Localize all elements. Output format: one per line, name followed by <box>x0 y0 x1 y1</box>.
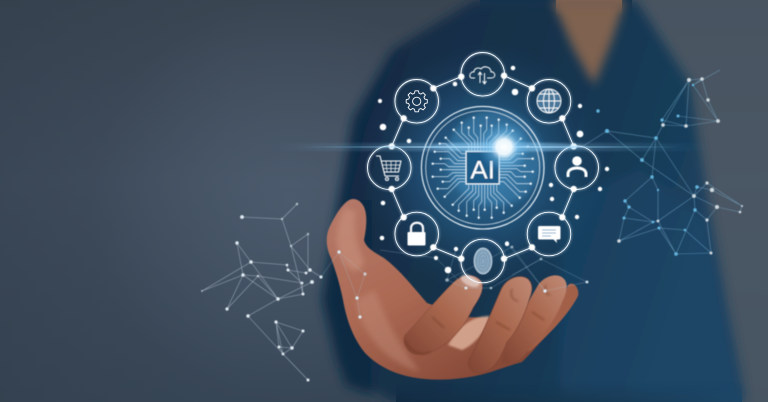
network: left cluster <box>202 204 321 380</box>
icon: padlock <box>408 223 426 246</box>
network: right cluster <box>580 70 742 254</box>
icon: chat bubble <box>538 226 560 243</box>
connecting ring and icon circles <box>368 53 598 283</box>
network: right cluster nodes <box>596 77 743 256</box>
icon: shopping cart <box>376 156 401 180</box>
emblem rings <box>421 106 544 229</box>
middle finger <box>468 277 532 373</box>
circuit traces <box>432 116 534 219</box>
ring finger <box>502 275 567 364</box>
person: blurred shirt <box>322 0 746 402</box>
hand <box>327 199 578 380</box>
index finger <box>404 276 482 355</box>
palm shading <box>355 290 420 372</box>
thumb highlight <box>337 208 364 271</box>
icon: gear <box>406 91 427 112</box>
icon: person <box>568 156 586 177</box>
finger creases <box>405 285 550 354</box>
loose dots around the ring <box>378 66 609 273</box>
palm hollow <box>448 316 490 350</box>
icon: cloud with arrows <box>470 67 495 84</box>
person: blurred neck <box>552 0 625 85</box>
light flare <box>270 121 710 173</box>
icon: fingerprint <box>474 248 492 274</box>
central circuit emblem <box>421 106 544 229</box>
ring segments between icons <box>392 76 574 259</box>
emblem glow fill <box>447 110 543 206</box>
icon: globe <box>537 89 561 113</box>
icon circles <box>368 53 598 283</box>
chip label: AI <box>470 157 495 184</box>
ring nodes <box>388 72 577 262</box>
palm and thumb <box>327 199 556 380</box>
network: lower mesh over hand <box>320 241 588 319</box>
little finger <box>528 283 578 352</box>
network glow behind the ring <box>358 43 608 293</box>
network: left cluster nodes <box>201 203 322 382</box>
pale fingertip glow <box>459 272 481 290</box>
